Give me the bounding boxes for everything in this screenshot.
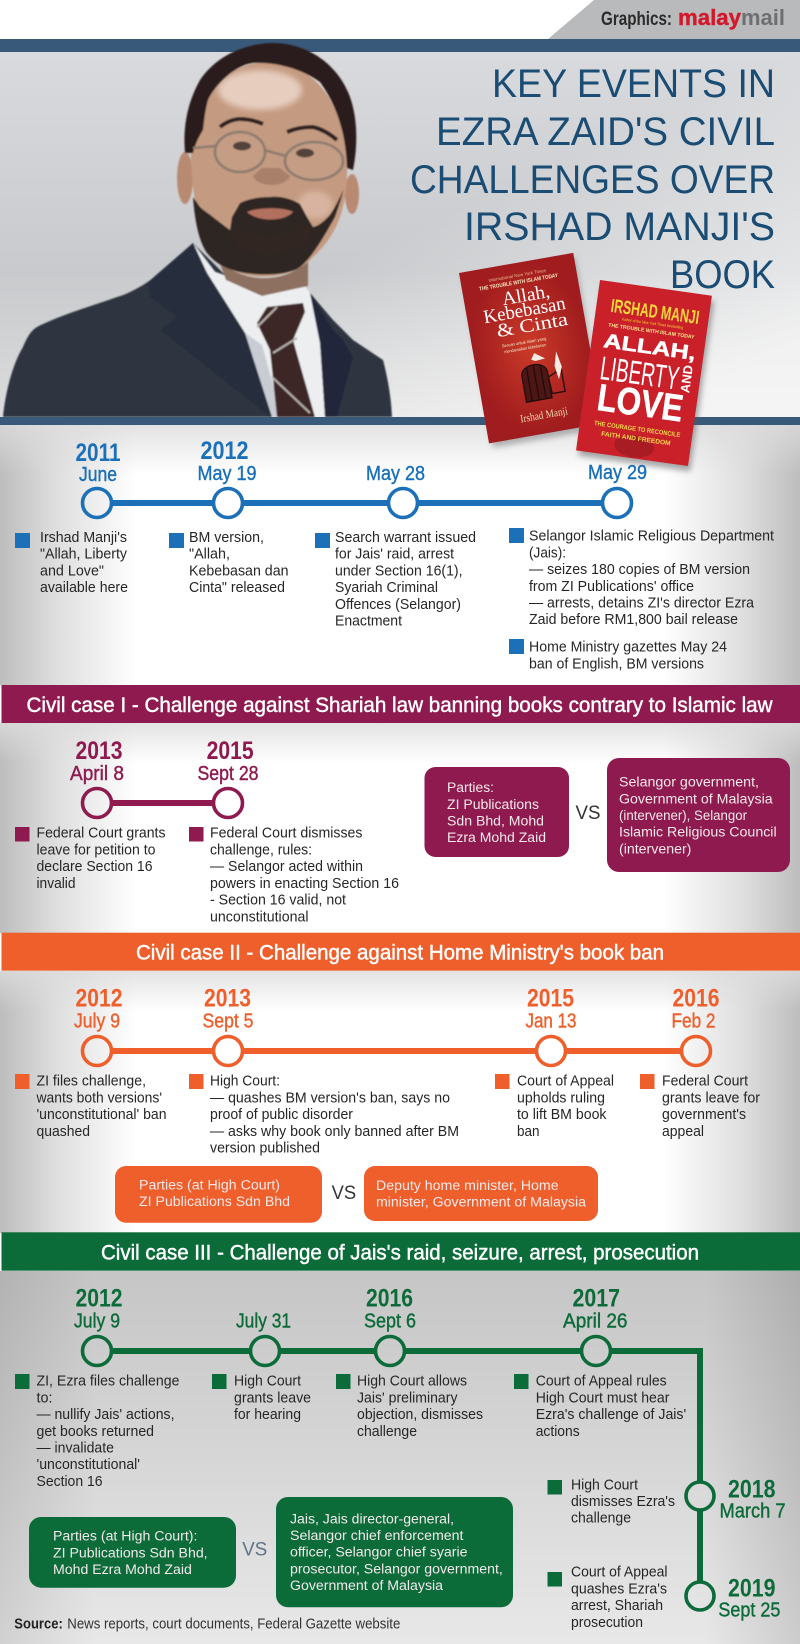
section heading: Civil case I: [2, 685, 800, 723]
event notes: [15, 825, 399, 925]
event notes: appeal: [662, 1123, 704, 1140]
section heading: Civil case III: Civil case III - Challenge of Jais's raid, seizure, arrest, prosecution: [101, 1240, 699, 1264]
book cover: Allah, Kebebasan & Cinta: Seruan untuk Islam yang: [501, 336, 547, 349]
event notes: BM version,: [189, 529, 264, 546]
versus label: VS: [242, 1539, 267, 1560]
event notes: Syariah Criminal: [335, 579, 438, 596]
book cover: Allah, Kebebasan & Cinta: [459, 253, 605, 448]
date labels: [76, 437, 647, 486]
parties box: respondents: Selangor chief enforcement: [290, 1528, 464, 1544]
event notes: - Section 16 valid, not: [210, 892, 347, 909]
book cover: Allah, Liberty and Love: Author of the New York Times bestselling: [621, 316, 684, 330]
parties box: petitioners: Mohd Ezra Mohd Zaid: [53, 1562, 192, 1578]
source note: Source:: [14, 1616, 63, 1633]
event notes: from ZI Publications' office: [529, 578, 694, 595]
parties box: respondents: Government of Malaysia: [619, 791, 773, 807]
title: EZRA ZAID'S CIVIL: [436, 110, 775, 154]
event notes: invalid: [36, 875, 76, 892]
event notes: Search warrant issued: [335, 529, 476, 546]
event notes: High Court must hear: [536, 1389, 669, 1406]
event notes: Federal Court: [662, 1073, 749, 1090]
date labels: [70, 737, 258, 785]
book cover: Allah, Kebebasan & Cinta: mendamaikan kebebasan: [504, 342, 547, 354]
event notes: upholds ruling: [517, 1089, 605, 1106]
event notes: version published: [210, 1140, 320, 1156]
parties box: petitioners: [424, 767, 569, 857]
event notes: Section 16: [36, 1473, 102, 1490]
event notes: — seizes 180 copies of BM version: [529, 561, 750, 578]
date labels: Sept 5: [202, 1010, 254, 1032]
event notes: Home Ministry gazettes May 24: [529, 639, 727, 656]
parties box: petitioners: Parties (at High Court):: [53, 1529, 197, 1545]
book cover: Allah, Liberty and Love: LOVE: [595, 377, 686, 431]
date labels: [74, 1285, 786, 1622]
event notes: for hearing: [234, 1406, 301, 1423]
event notes: 'unconstitutional': [36, 1456, 140, 1473]
portrait: Ezra Zaid: [3, 43, 392, 417]
event notes: ZI, Ezra files challenge: [36, 1373, 180, 1390]
date labels: May 19: [198, 463, 256, 485]
event notes: ban: [517, 1123, 540, 1140]
event notes: High Court: [234, 1373, 302, 1390]
book cover: Allah, Kebebasan & Cinta: Kebebasan: [482, 293, 568, 328]
timeline: civil case II: [15, 985, 760, 1223]
event notes: 'unconstitutional' ban: [36, 1106, 166, 1123]
section heading: Civil case II: [2, 933, 800, 971]
versus label: VS: [332, 1183, 356, 1204]
event notes: under Section 16(1),: [335, 562, 462, 579]
event notes: (Jais):: [529, 544, 566, 562]
date labels: Jan 13: [526, 1010, 576, 1032]
event notes: challenge: [357, 1423, 417, 1440]
event notes: to lift BM book: [517, 1106, 607, 1123]
event notes: wants both versions': [36, 1089, 162, 1106]
date labels: March 7: [720, 1500, 786, 1522]
parties box: respondents: officer, Selangor chief syarie: [290, 1545, 468, 1561]
date labels: Sept 25: [718, 1600, 780, 1622]
date labels: May 28: [366, 463, 425, 485]
title: CHALLENGES OVER: [410, 158, 775, 202]
event notes: get books returned: [36, 1423, 154, 1440]
event notes: Federal Court grants: [36, 825, 166, 842]
event notes: [15, 1373, 686, 1631]
event notes: dismisses Ezra's: [571, 1493, 675, 1510]
date labels: 2012: [200, 437, 248, 465]
event notes: quashed: [36, 1123, 90, 1140]
date labels: April 8: [70, 763, 124, 785]
event notes: High Court: [571, 1476, 639, 1493]
book cover: Allah, Kebebasan & Cinta: Irshad Manji: [519, 405, 569, 425]
credit tab: Graphics malaymail: mail: [741, 5, 785, 30]
event notes: grants leave for: [662, 1089, 760, 1106]
source note: News reports, court documents, Federal Gazette website: [67, 1616, 400, 1633]
timeline axis with markers: [82, 1336, 714, 1610]
event notes: — nullify Jais' actions,: [36, 1406, 174, 1423]
book cover: Allah, Liberty and Love: AND: [677, 364, 696, 394]
book cover: Allah, Kebebasan & Cinta: THE TROUBLE WITH ISLAM TODAY: [479, 273, 559, 293]
event notes: ZI files challenge,: [36, 1073, 146, 1090]
event notes: ban of English, BM versions: [529, 656, 704, 672]
title: KEY EVENTS IN: [492, 62, 775, 106]
section heading: Civil case III: [2, 1232, 800, 1271]
event notes: proof of public disorder: [210, 1106, 353, 1123]
date labels: 2015: [527, 985, 574, 1013]
section heading: Civil case I: Civil case I - Challenge against Shariah law banning books contrary to Islamic law: [26, 693, 773, 717]
timeline axis with markers: [82, 488, 632, 518]
section heading: Civil case II: Civil case II - Challenge against Home Ministry's book ban: [136, 940, 664, 964]
event notes: challenge, rules:: [210, 841, 312, 858]
date labels: [74, 985, 720, 1032]
date labels: 2016: [366, 1285, 413, 1313]
event notes: challenge: [571, 1510, 631, 1527]
event notes: actions: [536, 1423, 580, 1440]
date labels: 2016: [672, 985, 720, 1013]
event notes: "Allah, Liberty: [40, 546, 127, 563]
timeline: 2011-2012 background events: [15, 437, 775, 672]
date labels: 2017: [572, 1285, 620, 1313]
event notes: Offences (Selangor): [335, 596, 461, 613]
event notes: Cinta" released: [189, 579, 285, 596]
event notes: quashes Ezra's: [571, 1580, 667, 1597]
title: [410, 62, 775, 297]
event notes: leave for petition to: [36, 841, 156, 858]
event notes: — arrests, detains ZI's director Ezra: [529, 594, 755, 612]
event notes: "Allah,: [189, 546, 230, 563]
date labels: July 9: [74, 1010, 120, 1032]
parties box: petitioners: Ezra Mohd Zaid: [447, 830, 546, 846]
date labels: 2013: [76, 737, 122, 765]
timeline axis with markers: [82, 1036, 710, 1066]
event notes: Court of Appeal: [571, 1564, 668, 1581]
parties box: respondents: Selangor government,: [619, 775, 759, 791]
event notes: Ezra's challenge of Jais': [536, 1406, 686, 1423]
event notes: [15, 1073, 760, 1156]
event notes: — asks why book only banned after BM: [210, 1123, 459, 1140]
parties box: respondents: prosecutor, Selangor government,: [290, 1561, 503, 1577]
date labels: Sept 28: [198, 763, 258, 785]
book cover: Allah, Kebebasan & Cinta: Allah,: [501, 281, 551, 310]
credit tab: Graphics malaymail: [548, 0, 800, 39]
event notes: grants leave: [234, 1389, 311, 1406]
top header bar: [0, 39, 800, 52]
event notes: — quashes BM version's ban, says no: [210, 1089, 450, 1106]
event notes: Court of Appeal: [517, 1073, 614, 1090]
parties box: respondents: (intervener): [619, 841, 691, 857]
parties box: respondents: Deputy home minister, Home: [376, 1178, 559, 1194]
event notes: Court of Appeal rules: [536, 1373, 667, 1390]
date labels: 2013: [204, 985, 251, 1013]
date labels: April 26: [563, 1310, 628, 1332]
parties box: respondents: [364, 1166, 598, 1221]
parties box: petitioners: Sdn Bhd, Mohd: [447, 814, 544, 830]
parties box: petitioners: ZI Publications: [447, 797, 539, 813]
date labels: May 29: [588, 462, 647, 484]
event notes: unconstitutional: [210, 908, 308, 925]
event notes: powers in enacting Section 16: [210, 875, 399, 892]
parties box: petitioner: ZI Publications Sdn Bhd: [139, 1194, 290, 1210]
lower header bar: [0, 417, 800, 425]
parties box: petitioners: ZI Publications Sdn Bhd,: [53, 1546, 208, 1562]
parties box: respondents: [276, 1497, 513, 1607]
event notes: — Selangor acted within: [210, 858, 363, 875]
event notes: government's: [662, 1106, 746, 1123]
event notes: for Jais' raid, arrest: [335, 546, 455, 563]
date labels: 2019: [728, 1575, 776, 1603]
date labels: 2015: [207, 737, 254, 765]
event notes: High Court:: [210, 1073, 280, 1090]
event notes: High Court allows: [357, 1373, 467, 1390]
parties box: respondents: (intervener), Selangor: [619, 808, 747, 824]
book cover: Allah, Liberty and Love: THE TROUBLE WITH ISLAM TODAY: [608, 323, 695, 341]
parties box: petitioners: Parties:: [447, 780, 494, 796]
date labels: 2012: [76, 1285, 122, 1313]
parties box: respondents: minister, Government of Malaysia: [376, 1195, 586, 1211]
event notes: Kebebasan dan: [189, 562, 288, 579]
book cover: Allah, Kebebasan & Cinta: & Cinta: [495, 309, 570, 342]
event notes: Enactment: [335, 612, 403, 630]
parties box: petitioners: [29, 1517, 236, 1588]
event notes: Jais' preliminary: [357, 1389, 458, 1406]
book cover: Allah, Liberty and Love: THE COURAGE TO RECONCILE: [594, 420, 681, 439]
event notes: Selangor Islamic Religious Department: [529, 528, 775, 545]
timeline axis with markers: [82, 788, 242, 818]
date labels: 2018: [728, 1475, 776, 1503]
book cover: Allah, Kebebasan & Cinta: International New York Times: [488, 268, 547, 283]
timeline: civil case III: [15, 1285, 786, 1631]
parties box: petitioner: Parties (at High Court): [139, 1177, 280, 1193]
parties box: petitioner: [115, 1166, 322, 1223]
event notes: objection, dismisses: [357, 1406, 483, 1423]
title: IRSHAD MANJI'S: [464, 205, 775, 249]
date labels: Feb 2: [672, 1010, 716, 1032]
credit tab: Graphics malaymail: malay: [678, 5, 742, 30]
event notes: and Love": [40, 562, 104, 579]
event notes: arrest, Shariah: [571, 1597, 663, 1614]
book cover: Allah, Liberty and Love: [575, 280, 715, 471]
event notes: available here: [40, 579, 128, 596]
event notes: — invalidate: [36, 1440, 114, 1456]
event notes: prosecution: [571, 1614, 643, 1631]
book cover: Allah, Liberty and Love: IRSHAD MANJI: [609, 296, 700, 329]
book cover: Allah, Liberty and Love: LIBERTY: [598, 349, 681, 397]
event notes: [15, 528, 775, 672]
date labels: Sept 6: [364, 1310, 416, 1332]
parties box: respondents: [607, 758, 790, 872]
date labels: July 9: [74, 1310, 120, 1332]
event notes: Irshad Manji's: [40, 529, 127, 546]
timeline: civil case I: [15, 737, 790, 925]
parties box: respondents: Jais, Jais director-general,: [290, 1511, 454, 1527]
event notes: declare Section 16: [36, 858, 152, 875]
credit tab: Graphics malaymail: Graphics:: [601, 9, 672, 30]
parties box: respondents: Government of Malaysia: [290, 1578, 443, 1594]
book cover: Allah, Liberty and Love: ALLAH,: [602, 330, 697, 365]
event notes: Zaid before RM1,800 bail release: [529, 611, 738, 628]
book cover: Allah, Liberty and Love: FAITH AND FREEDOM: [601, 431, 671, 447]
title: BOOK: [670, 253, 775, 297]
parties box: respondents: Islamic Religious Council: [619, 825, 777, 841]
event notes: to:: [36, 1389, 52, 1406]
event notes: Federal Court dismisses: [210, 825, 362, 842]
date labels: July 31: [236, 1310, 291, 1332]
versus label: VS: [576, 803, 600, 824]
date labels: 2012: [76, 985, 122, 1013]
date labels: 2011: [76, 439, 121, 467]
date labels: June: [79, 464, 117, 486]
